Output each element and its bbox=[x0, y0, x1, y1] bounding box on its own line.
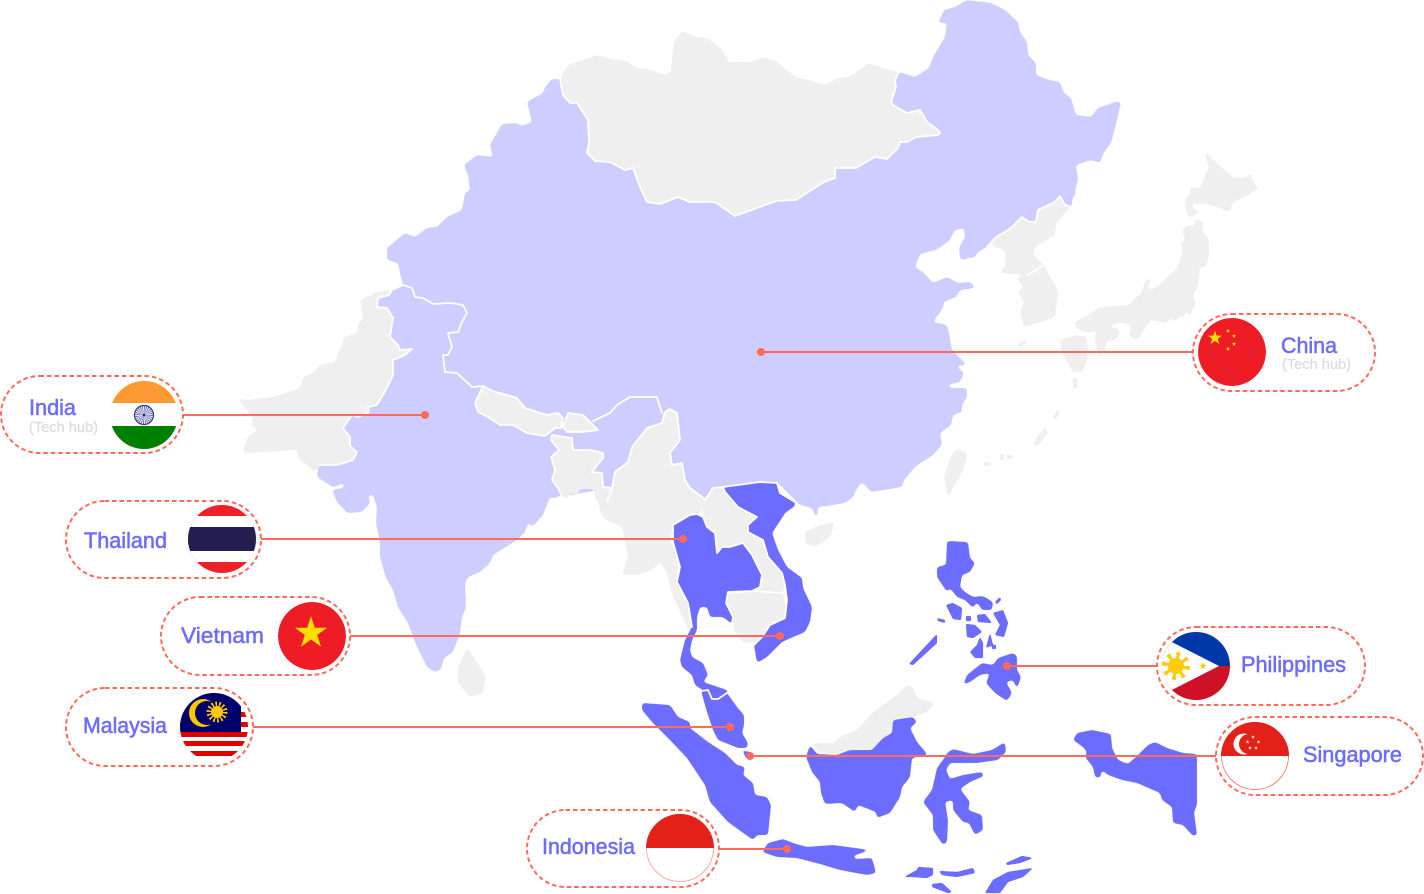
country: Philippines, Luzon bbox=[937, 541, 993, 610]
callout: India bbox=[1, 376, 429, 453]
marker dot: Thailand bbox=[679, 535, 687, 543]
leader line: Thailand bbox=[261, 538, 683, 540]
callout: China bbox=[757, 314, 1375, 391]
label: Philippines: Philippines bbox=[1241, 652, 1346, 677]
country: Japan, Kyushu bbox=[1060, 335, 1088, 372]
callout: Thailand bbox=[66, 501, 687, 578]
callout: Philippines bbox=[1003, 627, 1365, 705]
marker dot: Philippines bbox=[1003, 662, 1011, 670]
country: Sri Lanka bbox=[458, 647, 486, 697]
pill: China bbox=[1193, 314, 1375, 391]
marker dot: Vietnam bbox=[776, 632, 784, 640]
flag: Vietnam bbox=[278, 602, 346, 670]
country: China bbox=[387, 0, 1121, 520]
marker dot: Indonesia bbox=[783, 845, 791, 853]
flag: Singapore bbox=[1221, 722, 1289, 790]
leader line: Philippines bbox=[1007, 665, 1157, 667]
flag: Philippines bbox=[1156, 632, 1230, 700]
label: Indonesia: Indonesia bbox=[542, 834, 636, 859]
flag: India bbox=[110, 381, 178, 449]
pill: Thailand bbox=[66, 501, 261, 578]
country: India bbox=[317, 285, 665, 672]
pill: Singapore bbox=[1216, 717, 1423, 795]
country: Myanmar bbox=[598, 409, 705, 635]
country: Bangladesh bbox=[551, 435, 612, 503]
country: Singapore bbox=[743, 751, 752, 758]
leader line: Singapore bbox=[750, 755, 1216, 757]
country: Philippines, Palawan bbox=[909, 634, 937, 665]
marker dot: Malaysia bbox=[726, 723, 734, 731]
label: Singapore: Singapore bbox=[1303, 742, 1402, 767]
country: Thailand bbox=[673, 514, 762, 699]
marker dot: China bbox=[757, 348, 765, 356]
borders around mainland neighbours bbox=[475, 386, 783, 593]
country: Indonesia, Papua bbox=[1073, 730, 1197, 836]
leader line: Indonesia bbox=[719, 848, 787, 850]
marker dot: India bbox=[421, 411, 429, 419]
leader line: India bbox=[183, 414, 425, 416]
pill: Malaysia bbox=[66, 688, 253, 766]
borders around China and India bbox=[320, 72, 1071, 465]
country: Japan, Shikoku bbox=[1095, 327, 1120, 355]
flag: China bbox=[1198, 318, 1266, 386]
country: Pakistan bbox=[237, 290, 412, 472]
sublabel: China tech hub: (Tech hub) bbox=[1282, 356, 1351, 373]
flag: Indonesia bbox=[646, 814, 714, 882]
country: Japan, Hokkaido bbox=[1185, 152, 1259, 218]
sublabel: India tech hub: (Tech hub) bbox=[29, 419, 98, 436]
flag: Thailand bbox=[188, 505, 256, 573]
land: China and India bbox=[317, 0, 1121, 672]
country: Indonesia, Lesser Sunda islands bbox=[904, 856, 1033, 893]
pill: Indonesia bbox=[527, 810, 719, 887]
land: small highlighted islands bbox=[743, 597, 1033, 893]
country: Japan, Honshu bbox=[1075, 219, 1209, 340]
pill: Vietnam bbox=[161, 597, 350, 675]
land: non-highlighted countries, base layer bbox=[237, 31, 1259, 754]
callout: Indonesia bbox=[527, 810, 791, 887]
islands: southern Japan bbox=[984, 340, 1077, 466]
pill: Philippines bbox=[1157, 627, 1365, 705]
callout: Vietnam bbox=[161, 597, 784, 675]
leader line: Malaysia bbox=[253, 726, 730, 728]
country: Nepal bbox=[475, 386, 563, 436]
label: Thailand: Thailand bbox=[84, 528, 167, 553]
borders around highlighted mainland countries bbox=[673, 482, 795, 699]
country: Philippines, Visayas bbox=[937, 597, 1008, 658]
country: Korea bbox=[991, 196, 1071, 327]
callout: Singapore bbox=[746, 717, 1423, 795]
label: Malaysia: Malaysia bbox=[83, 713, 168, 738]
country: Indonesia, Sumatra bbox=[642, 703, 771, 840]
marker dot: Singapore bbox=[746, 752, 754, 760]
country: Malaysia, peninsula bbox=[701, 690, 748, 748]
flag: Malaysia bbox=[180, 693, 248, 761]
country: Cambodia bbox=[726, 591, 786, 643]
country: Vietnam bbox=[723, 482, 812, 663]
country: Bhutan bbox=[563, 413, 598, 432]
country: Mongolia bbox=[560, 31, 940, 216]
pill: India bbox=[1, 376, 183, 453]
land: South Asian and mainland neighbours bbox=[475, 386, 786, 643]
label: China: China bbox=[1281, 333, 1338, 358]
country: Laos bbox=[703, 487, 785, 593]
country: Taiwan bbox=[944, 448, 968, 497]
country: Philippines, Mindanao bbox=[963, 653, 1021, 701]
callout: Malaysia bbox=[66, 688, 734, 766]
leader line: Vietnam bbox=[350, 635, 780, 637]
country: Indonesia, Java bbox=[762, 839, 876, 875]
label: India: India bbox=[29, 395, 77, 420]
country: Malaysia, Sarawak and Sabah bbox=[813, 685, 935, 754]
land: highlighted countries bbox=[642, 482, 1197, 875]
country: Indonesia, Kalimantan bbox=[806, 717, 928, 818]
label: Vietnam: Vietnam bbox=[181, 623, 264, 648]
leader line: China bbox=[761, 351, 1193, 353]
country: Indonesia, Sulawesi bbox=[923, 742, 1006, 845]
map: Asia bbox=[237, 0, 1259, 893]
island: Hainan bbox=[805, 522, 835, 547]
